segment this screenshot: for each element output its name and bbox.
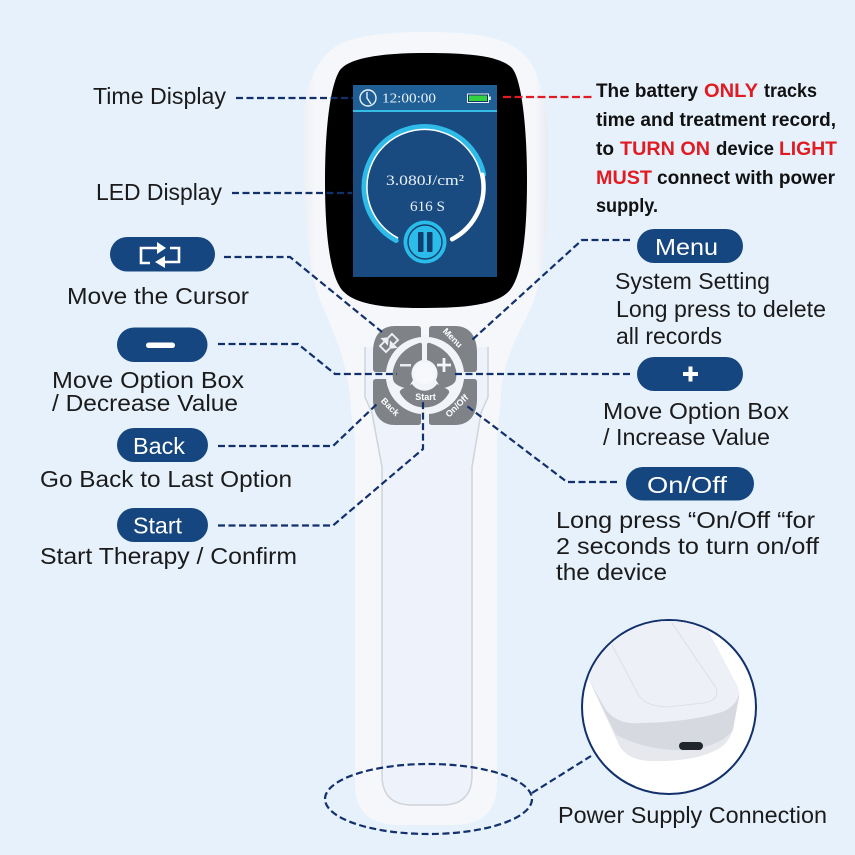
icon: battery [468,94,491,102]
text: long press on/off: the device [556,559,667,585]
pill: move cursor [110,237,215,272]
on/off button [429,379,477,425]
leader lines [218,97,630,793]
text: system setting: all records [616,323,722,349]
magnified charging port [570,610,756,794]
text: move option box increase: / Increase Value [603,424,770,450]
battery note: connect with power [657,168,836,189]
pill: minus [117,328,208,362]
text: long press on/off [556,507,820,585]
battery note: supply. [596,196,658,217]
text: system setting: Long press to delete [616,296,826,322]
text: move option box decrease [52,367,245,416]
battery note: tracks [764,81,817,102]
cursor glyph [378,332,400,354]
time reading: 616 S [410,199,445,215]
pill: plus [637,357,743,391]
plus button [427,343,456,388]
battery note: MUST [596,168,652,189]
control buttons [373,326,477,425]
device body [303,32,548,825]
label: LED display: LED Display [96,179,222,205]
menu button [429,326,477,372]
clock time: 12:00:00 [382,90,436,106]
pill: start: Start [133,512,183,538]
handle inner panel [365,347,488,805]
usb-c port [679,742,703,750]
on/off label: On/Off [443,392,471,419]
dashed ellipse: charging port area [325,764,532,834]
black screen bezel [325,53,527,308]
battery note: ONLY [704,81,758,102]
cursor button [373,326,421,372]
text: go back: Go Back to Last Option [40,466,292,492]
label: power supply connection: Power Supply Connection [558,802,827,828]
battery note: device [716,139,774,160]
text: start therapy: Start Therapy / Confirm [40,543,297,569]
text: move the cursor: Move the Cursor [67,283,249,309]
text: system setting [615,268,826,349]
battery note: to [596,139,614,160]
menu label: Menu [441,326,464,350]
back button [373,379,421,425]
pill: on/off: On/Off [647,472,728,498]
pill: menu [637,229,743,263]
status bar [353,85,497,112]
start label: Start [415,392,436,402]
text: move option box increase: Move Option Box [603,398,790,424]
battery note: The battery [596,81,698,102]
pill: menu: Menu [655,234,718,260]
pill: back [117,428,208,462]
battery note [596,81,837,217]
text: long press on/off: 2 seconds to turn on/off [556,533,820,559]
battery note: TURN ON [620,139,710,160]
pill: start [117,508,208,542]
icon: clock [360,90,376,106]
dose reading: 3.080J/cm² [386,173,465,189]
pill: back: Back [133,433,185,459]
minus glyph [400,364,411,366]
start button [400,384,449,407]
text: move option box decrease: / Decrease Value [52,390,238,416]
icon: pause button [404,220,446,264]
battery note: time and treatment record, [596,110,836,131]
text: move option box decrease: Move Option Box [52,367,245,393]
text: move option box increase [603,398,790,450]
pill: on/off [626,467,754,500]
back label: Back [379,396,402,419]
LED display screen [353,85,497,277]
progress ring [364,127,484,240]
minus button [393,343,422,388]
label: time display: Time Display [93,83,227,109]
text: system setting: System Setting [615,268,770,294]
plus glyph [437,358,451,372]
battery note: LIGHT [779,139,837,160]
text: long press on/off: Long press “On/Off “for [556,507,815,533]
center hub [414,362,436,384]
